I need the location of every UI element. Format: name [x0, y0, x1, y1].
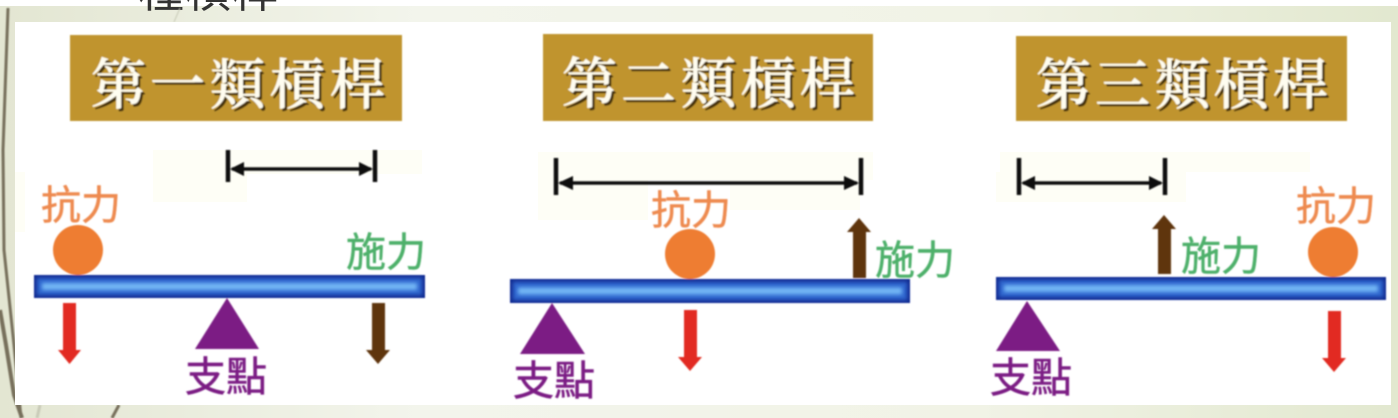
decorative branch lines [0, 8, 180, 418]
arrow: effort up [847, 218, 871, 278]
title: second-class lever: 第二類槓桿 [562, 54, 855, 115]
beam [996, 277, 1386, 300]
title: third-class lever: 第三類槓桿 [1036, 55, 1328, 116]
title: second-class lever [543, 34, 873, 121]
label: effort: 施力 [1181, 235, 1261, 279]
ball: load [1308, 227, 1358, 277]
title: first-class lever: 第一類槓桿 [91, 55, 385, 116]
arrow: effort up [1152, 215, 1176, 274]
dimension arrow [556, 158, 861, 195]
title: first-class lever: 第一類槓桿 [94, 58, 388, 118]
pale image artefact patches [15, 150, 1310, 232]
arrow: resistance down [1322, 311, 1346, 372]
ball: load [665, 229, 715, 279]
title: first-class lever [70, 35, 402, 121]
beam [510, 279, 910, 303]
fulcrum [996, 301, 1060, 351]
arrow: resistance down [678, 310, 702, 371]
title: third-class lever [1016, 36, 1347, 121]
panel: second-class lever [510, 34, 955, 404]
label: effort: 施力 [875, 239, 955, 283]
label: fulcrum: 支點 [990, 355, 1072, 401]
dimension arrow [228, 150, 375, 182]
fulcrum [195, 298, 259, 349]
panel: third-class lever [990, 36, 1386, 401]
label: effort: 施力 [346, 231, 426, 275]
label: resistance: 抗力 [1296, 185, 1376, 229]
label: fulcrum: 支點 [513, 358, 595, 404]
dimension arrow [1019, 158, 1165, 195]
label: resistance: 抗力 [651, 189, 731, 233]
arrow: resistance down [58, 303, 81, 364]
arrow: effort down [366, 303, 390, 364]
title: second-class lever: 第二類槓桿 [564, 56, 858, 118]
label: fulcrum: 支點 [185, 354, 267, 400]
ball: load [53, 225, 103, 275]
fulcrum [520, 303, 585, 354]
title: third-class lever: 第三類槓桿 [1038, 58, 1331, 118]
label: resistance: 抗力 [41, 184, 121, 228]
panel: first-class lever [34, 35, 426, 400]
beam [34, 275, 425, 298]
